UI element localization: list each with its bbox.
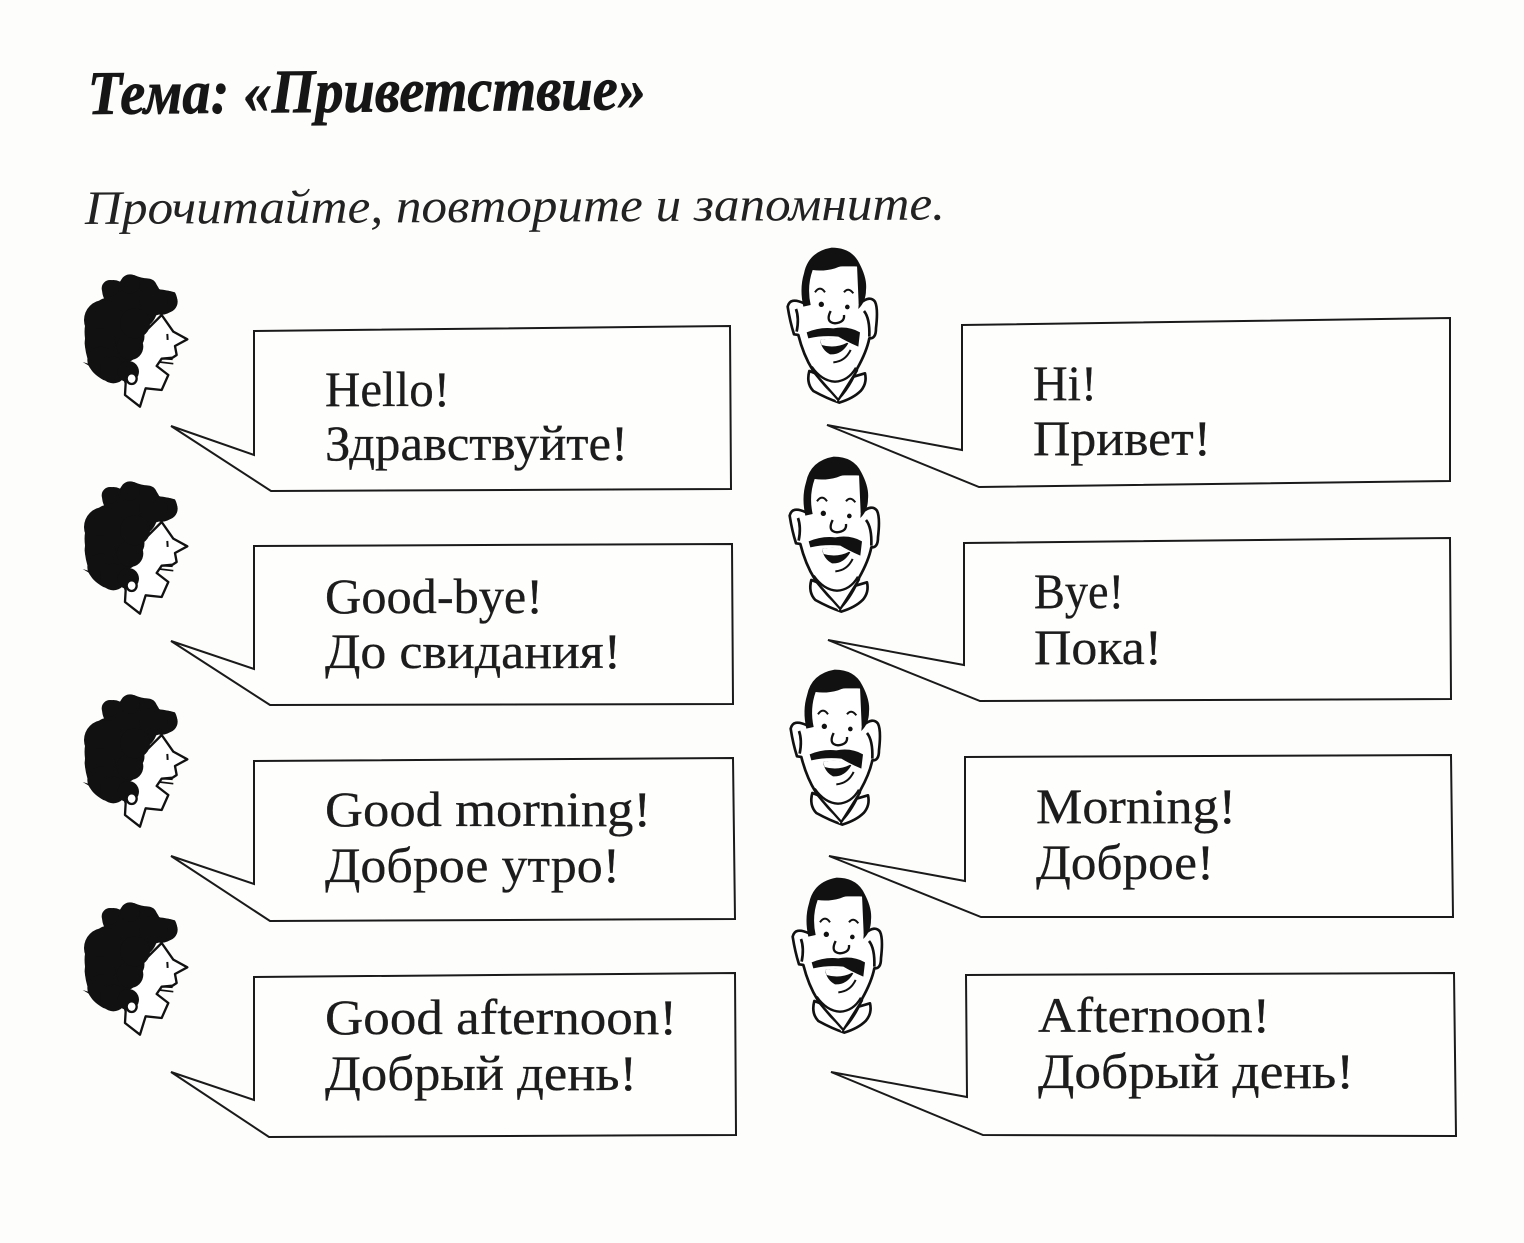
phrase: Good morning! <box>325 781 651 837</box>
phrase <box>1034 563 1162 675</box>
icon: woman head <box>83 274 187 407</box>
phrase: Добрый день! <box>1038 1043 1354 1099</box>
phrase: Good-bye! <box>325 568 543 624</box>
phrase <box>325 781 651 893</box>
woman row 1: Hello <box>83 274 731 491</box>
speech bubble <box>171 326 731 491</box>
icon: man head <box>790 457 879 612</box>
speech bubble <box>171 758 735 921</box>
speech bubble <box>171 544 733 705</box>
phrase <box>325 989 677 1101</box>
phrase <box>325 568 621 679</box>
phrase <box>1033 355 1211 466</box>
phrase: Пока! <box>1034 619 1162 675</box>
title: Тема: «Приветствие» <box>88 55 646 128</box>
phrase: Bye! <box>1034 563 1124 619</box>
man row 4: Afternoon <box>793 878 1456 1136</box>
phrase: Hi! <box>1033 355 1097 411</box>
icon: woman head <box>83 481 187 614</box>
phrase <box>1038 987 1354 1099</box>
man row 3: Morning <box>791 670 1453 917</box>
phrase: Afternoon! <box>1038 987 1270 1043</box>
speech bubble <box>171 973 736 1137</box>
woman row 3: Good morning <box>83 694 735 921</box>
icon: man head <box>793 878 882 1033</box>
phrase <box>325 361 628 471</box>
icon: man head <box>788 248 877 403</box>
woman row 2: Good-bye <box>83 481 733 705</box>
woman row 4: Good afternoon <box>83 902 736 1137</box>
phrase <box>1036 778 1236 890</box>
man row 1: Hi <box>788 248 1450 487</box>
icon: man head <box>791 670 880 825</box>
phrase: Hello! <box>325 361 450 417</box>
man row 2: Bye <box>790 457 1451 701</box>
speech bubble <box>829 755 1453 917</box>
icon: woman head <box>83 902 187 1035</box>
icon: woman head <box>83 694 187 827</box>
instruction text: Прочитайте, повторите и запомните. <box>84 177 945 235</box>
phrase: Привет! <box>1033 410 1211 466</box>
phrase: Добрый день! <box>325 1045 637 1101</box>
speech bubble <box>831 973 1456 1136</box>
phrase: Здравствуйте! <box>325 415 628 471</box>
phrase: Доброе! <box>1036 834 1214 890</box>
phrase: Good afternoon! <box>325 989 677 1045</box>
phrase: До свидания! <box>325 623 621 679</box>
phrase: Morning! <box>1036 778 1236 834</box>
phrase: Доброе утро! <box>325 837 620 893</box>
speech bubble <box>827 318 1450 487</box>
speech bubble <box>828 538 1451 701</box>
